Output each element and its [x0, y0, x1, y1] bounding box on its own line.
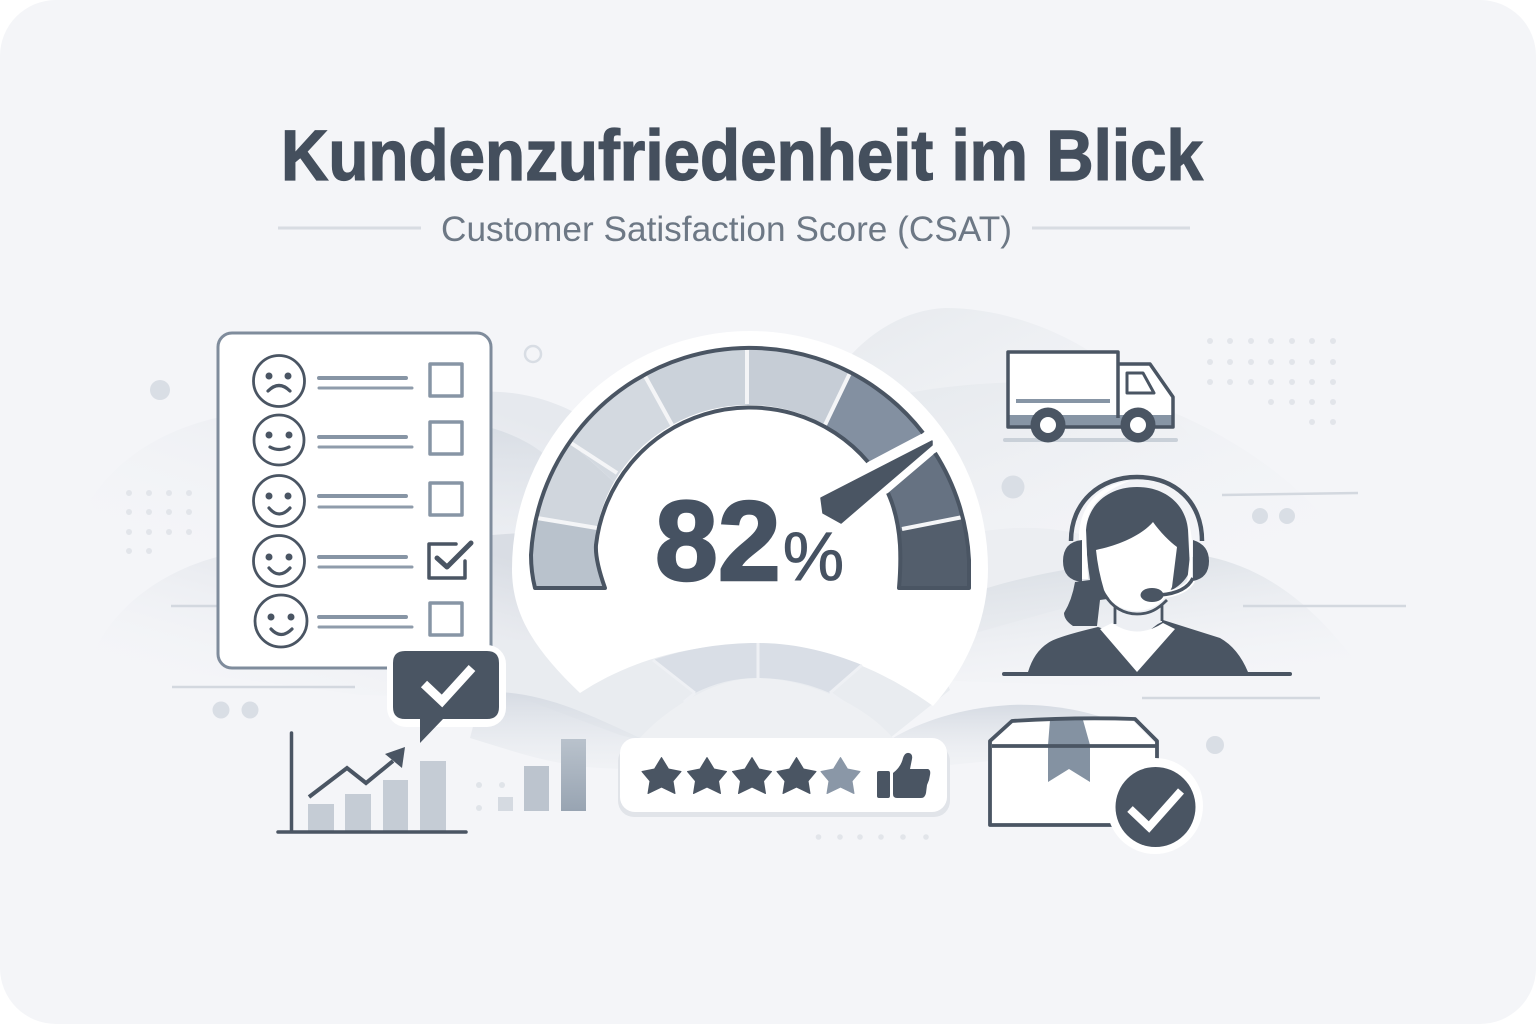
headset: [1063, 477, 1209, 602]
survey card: [218, 333, 491, 668]
face: happy: [254, 536, 304, 586]
subtitle: Customer Satisfaction Score (CSAT): [441, 210, 1012, 249]
jaw and neck lines: [1105, 595, 1167, 624]
gauge segment 5: [747, 349, 850, 425]
separators: [537, 350, 963, 529]
empty checkboxes: [430, 364, 462, 635]
half-tone star: [821, 758, 860, 794]
title: Kundenzufriedenheit im Blick: [281, 117, 1203, 196]
trend arrow: [309, 761, 393, 797]
gauge segment 1: [531, 518, 605, 588]
face: very unhappy: [254, 356, 304, 406]
gauge outlines: [531, 348, 969, 588]
small bars: [476, 739, 586, 811]
ticked checkbox: [429, 543, 471, 578]
speech bubble with check: [387, 645, 506, 743]
check badge: [1107, 758, 1203, 854]
ghost gauge reflection: [653, 643, 862, 702]
face: smile: [254, 476, 304, 526]
collar: [1100, 623, 1175, 672]
hair: [1064, 487, 1190, 626]
thumbs up: [877, 753, 930, 798]
face: [1096, 522, 1177, 611]
gauge value: 82%: [655, 478, 844, 604]
gauge segment 4: [645, 349, 747, 425]
text lines: [319, 378, 406, 617]
face: very happy: [255, 595, 307, 647]
delivery truck: [1005, 352, 1176, 442]
needle: [821, 441, 932, 523]
gauge segment 8: [898, 517, 969, 588]
neck: [1115, 600, 1162, 634]
gauge segment 2: [537, 443, 614, 528]
gauge segment 3: [571, 376, 672, 482]
parcel with check: [989, 718, 1203, 854]
decorative dots and lines: [126, 338, 1406, 840]
gauge halo: [512, 331, 988, 706]
growth bar chart: [278, 733, 466, 832]
torso: [1028, 620, 1248, 672]
background hills: [90, 308, 1365, 770]
customer service agent: [1004, 477, 1290, 674]
star rating card: [618, 738, 950, 817]
gauge: [531, 348, 969, 604]
face: neutral smile: [254, 415, 304, 465]
stars: [642, 758, 816, 794]
gauge segment 6: [825, 373, 923, 462]
gauge segment 7: [888, 453, 963, 530]
